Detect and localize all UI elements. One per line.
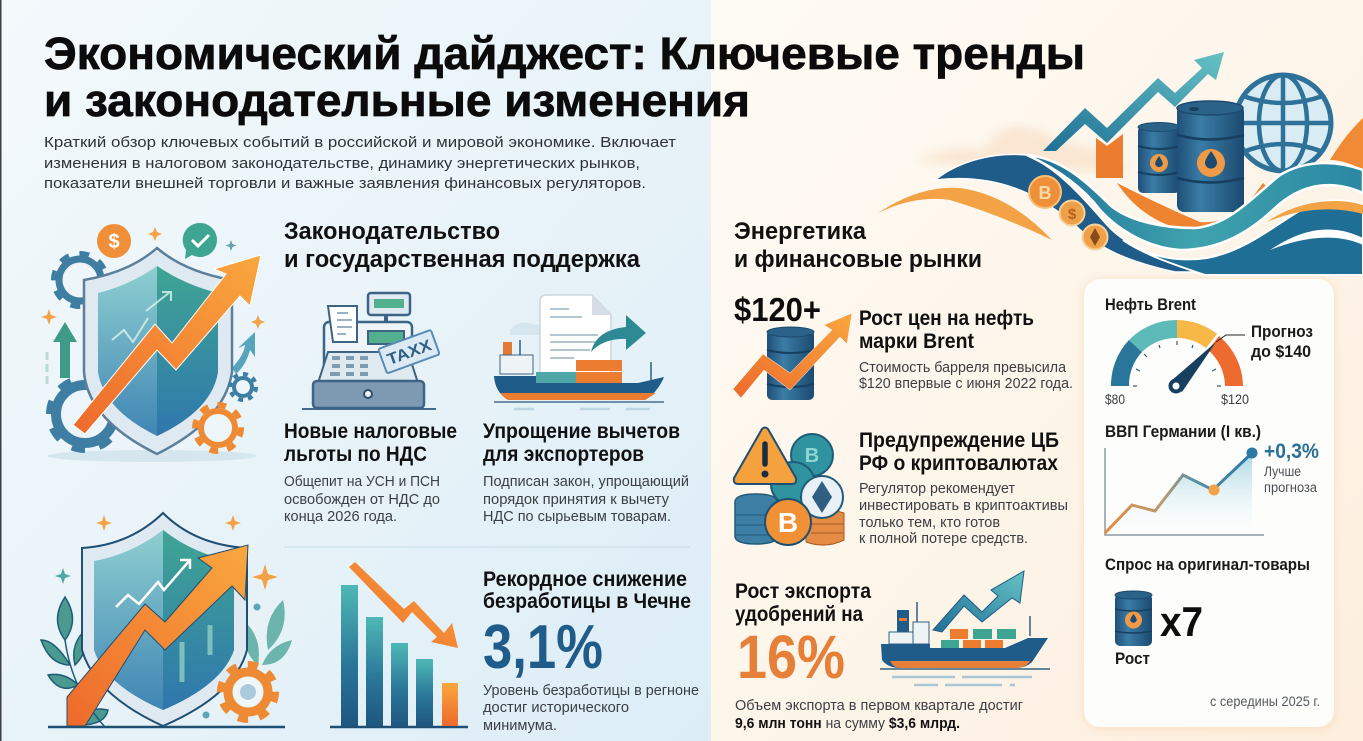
- coin: ethereum: [1082, 224, 1108, 250]
- GDP callout: [1264, 440, 1319, 495]
- icon: gear orange: [221, 665, 275, 719]
- icon: rising orange arrow: [73, 255, 261, 434]
- icon: rising arrow: [1043, 52, 1224, 151]
- text block: exporters: Подписан закон, упрощающий: [483, 474, 689, 490]
- footnote: с середины 2025 г.: [1210, 694, 1320, 709]
- heading: energy: Энергетика: [734, 218, 867, 245]
- text block: crypto warning: Регулятор рекомендует: [859, 481, 1015, 497]
- text block: VAT breaks: конца 2026 года.: [284, 509, 397, 525]
- text block: crypto warning: [859, 429, 1068, 547]
- tax label: TAXX: [385, 337, 434, 369]
- icon: warning and crypto coins: B: [805, 445, 819, 467]
- icon: cash register: [302, 293, 440, 409]
- background right: [711, 0, 1363, 741]
- text block: Brent: Стоимость барреля превысила: [859, 360, 1067, 376]
- text block: VAT breaks: освобожден от НДС до: [284, 492, 440, 508]
- label: Brent: Нефть Brent: [1105, 295, 1196, 314]
- icon: leaves left: [41, 597, 108, 727]
- multiplier: x7: [1160, 598, 1203, 645]
- text block: VAT breaks: льготы по НДС: [284, 443, 427, 466]
- text block: crypto warning: только тем, кто готов: [859, 515, 1000, 531]
- gauge: Brent price: [1111, 320, 1245, 392]
- stat: oil price: $120+: [734, 291, 821, 328]
- text block: crypto warning: к полной потере средств.: [859, 531, 1028, 547]
- wave: rear orange: [1117, 183, 1275, 232]
- shield inner: [94, 530, 234, 710]
- text block: fertilizer export: [735, 580, 1023, 732]
- icon: barrel: [1115, 591, 1152, 646]
- text block: VAT breaks: [284, 420, 457, 525]
- text block: exporters: НДС по сырьевым товарам.: [483, 509, 671, 525]
- teal arrow: [591, 315, 646, 352]
- label: Germany GDP: ВВП Германии (I кв.): [1105, 422, 1261, 441]
- text block: unemployment record: достиг исторического: [483, 700, 629, 716]
- heading: legislation: и государственная поддержка: [284, 246, 641, 273]
- icon: gear bottom left: [50, 379, 120, 449]
- icon: warning and crypto coins: [734, 428, 844, 545]
- GDP callout: +0,3%: [1264, 440, 1319, 463]
- wave: teal: [1027, 155, 1363, 250]
- bar chart: unemployment falling: [330, 562, 468, 727]
- text block: unemployment record: минимума.: [483, 718, 557, 734]
- heading: legislation: Законодательство: [284, 218, 500, 245]
- text block: fertilizer export: 16%: [737, 623, 845, 691]
- icon: rising orange arrow: [67, 545, 248, 726]
- text block: Brent: $120 впервые с июня 2022 года.: [859, 376, 1073, 392]
- text block: fertilizer export: Рост экспорта: [735, 580, 871, 603]
- title: Экономический дайджест: Ключевые тренды: [44, 28, 1085, 79]
- text block: Brent: Рост цен на нефть: [859, 307, 1034, 330]
- gauge scale labels: $120: [1221, 391, 1249, 407]
- forecast label: [1251, 322, 1313, 361]
- panel: key indicators card: [1084, 279, 1334, 727]
- coin: bitcoin: [1029, 176, 1061, 208]
- gauge scale labels: $80: [1105, 391, 1125, 407]
- text block: exporters: порядок принятия к вычету: [483, 492, 670, 508]
- icon: coin dollar: $: [108, 231, 120, 253]
- icon: check bubble: [183, 223, 217, 259]
- icon: small barrel: [1138, 122, 1180, 193]
- icon: warning and crypto coins: B: [778, 507, 798, 538]
- icon: leaves right: [246, 600, 292, 665]
- text block: exporters: [483, 420, 689, 525]
- shield outer: [84, 248, 232, 454]
- forecast label: Прогноз: [1251, 322, 1313, 341]
- shield inner: [98, 266, 218, 436]
- icon: cargo ship with arrow: [880, 571, 1050, 685]
- icon: green up arrow: [53, 322, 77, 378]
- gauge scale labels: [1105, 391, 1249, 407]
- coin: bitcoin: B: [1038, 183, 1052, 203]
- icon: blue small arrow: [232, 332, 255, 374]
- forecast label: до $140: [1251, 342, 1311, 361]
- coin: dollar: [1060, 200, 1084, 226]
- title: [44, 28, 1085, 126]
- label: growth: Рост: [1115, 649, 1150, 668]
- wave: orange ribbon: [878, 188, 1052, 240]
- orange sail shape: [1096, 134, 1123, 178]
- text block: exporters: для экспортеров: [483, 443, 644, 466]
- text block: unemployment record: Уровень безработицы в регноне: [483, 683, 699, 699]
- GDP callout: прогноза: [1264, 480, 1317, 495]
- line chart: German GDP: [1105, 448, 1264, 535]
- title: и законодательные изменения: [44, 75, 750, 126]
- icon: sparkles: [41, 227, 265, 329]
- heading: legislation: [284, 218, 641, 273]
- wave: dark blue: [935, 154, 1215, 272]
- GDP callout: Лучше: [1264, 464, 1301, 479]
- icon: gear top left: [54, 254, 106, 306]
- heading: energy: и финансовые рынки: [734, 246, 982, 273]
- wave: lower teal and blue: [1123, 200, 1363, 275]
- banner illustration: oil, globe and waves: [878, 52, 1363, 275]
- text block: exporters: Упрощение вычетов: [483, 420, 680, 443]
- text block: unemployment record: [483, 568, 699, 734]
- intro text: Краткий обзор ключевых событий в российской и мировой экономике. Включает: [44, 134, 676, 151]
- heading: energy: [734, 218, 982, 273]
- icon: coin dollar: [97, 224, 131, 258]
- text block: VAT breaks: Новые налоговые: [284, 420, 457, 443]
- icon: barrel with arrow: [733, 313, 852, 400]
- icon: falling arrow: [349, 562, 458, 648]
- icon: ship with document: [494, 295, 664, 409]
- icon: sparkles: [96, 515, 278, 590]
- text block: fertilizer export: 9,6 млн тонн на сумму $3,6 млрд.: [735, 716, 960, 732]
- illustration: shield with leaves and gear: [41, 513, 292, 727]
- text block: fertilizer export: Объем экспорта в первом квартале достиг: [735, 698, 1023, 714]
- background left: [0, 0, 711, 741]
- icon: gear orange: [195, 405, 241, 451]
- text block: unemployment record: Рекордное снижение: [483, 568, 687, 591]
- text block: unemployment record: безработицы в Чечне: [483, 590, 691, 613]
- intro text: изменения в налоговом законодательстве, динамику энергетических рынков,: [44, 155, 640, 172]
- intro text: [44, 134, 676, 192]
- icon: large barrel: [1177, 101, 1244, 212]
- text block: unemployment record: 3,1%: [483, 613, 603, 682]
- icon: dashes: [46, 352, 48, 385]
- text block: crypto warning: РФ о криптовалютах: [859, 452, 1058, 475]
- text block: crypto warning: Предупреждение ЦБ: [859, 429, 1059, 452]
- icon: globe: [1235, 75, 1331, 171]
- shield outer: [82, 513, 247, 726]
- intro text: показатели внешней торговли и важные заявления финансовых регуляторов.: [44, 175, 646, 192]
- illustration: shield with rising arrow and gears: [41, 223, 265, 462]
- icon: gear small: [230, 374, 256, 400]
- text block: Brent: [859, 307, 1073, 392]
- text block: crypto warning: инвестировать в криптоактивы: [859, 498, 1068, 514]
- text block: VAT breaks: Общепит на УСН и ПСН: [284, 474, 440, 490]
- text block: fertilizer export: удобрений на: [735, 603, 863, 626]
- label: original goods demand: Спрос на оригинал-товары: [1105, 555, 1310, 574]
- text block: Brent: марки Brent: [859, 330, 974, 353]
- coin: dollar: $: [1068, 206, 1077, 223]
